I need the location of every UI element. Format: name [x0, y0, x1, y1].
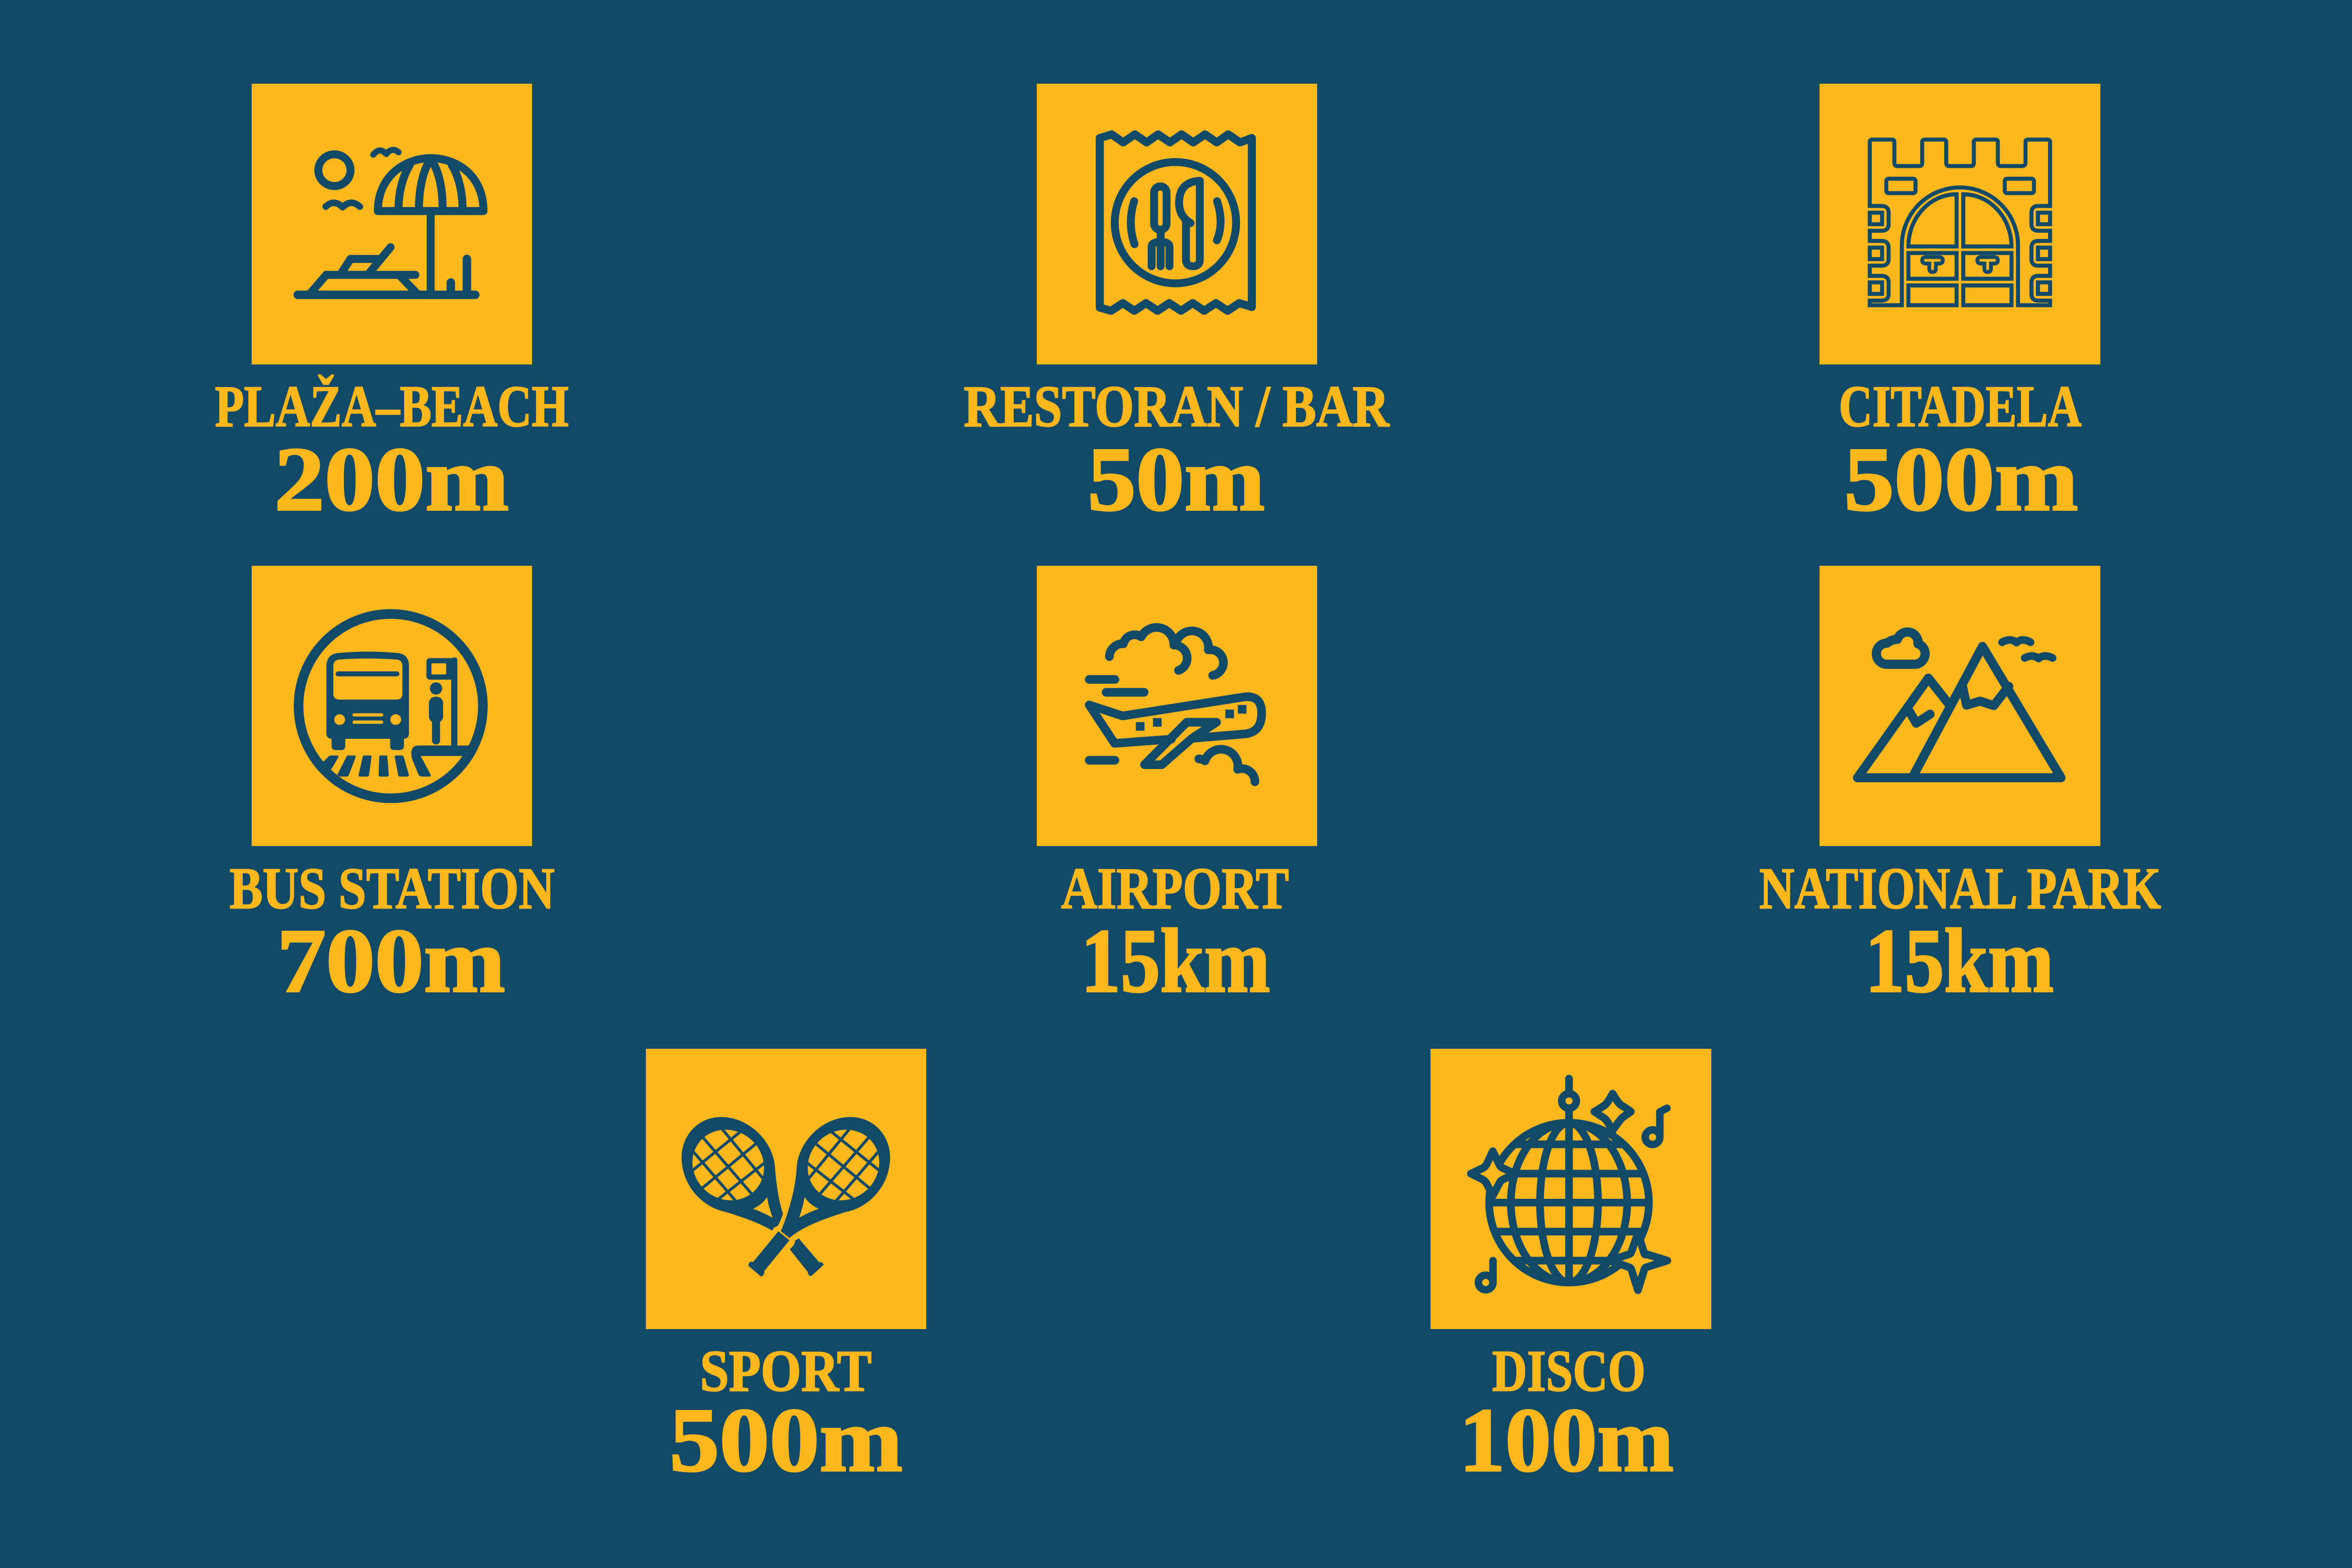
label: airport: AIRPORT	[1061, 856, 1289, 921]
distance: beach: 200m	[274, 428, 509, 530]
tile: restaurant	[1037, 84, 1317, 364]
icon: plate with fork and knife on placemat	[1100, 135, 1252, 311]
label: citadel: CITADELA	[1839, 374, 2082, 439]
tile: beach	[252, 84, 532, 364]
icon: disco ball with sparkles and notes	[1471, 1078, 1667, 1290]
panel: sport	[646, 1049, 926, 1490]
panel: beach	[215, 84, 569, 530]
panel: airport	[1037, 566, 1317, 1011]
icon: crossed tennis rackets	[678, 1115, 894, 1276]
icon: airplane with clouds	[1089, 627, 1262, 782]
distance: bus station: 700m	[277, 910, 505, 1011]
icon: fortress gate	[1868, 140, 2052, 305]
icon: bus at stop	[299, 614, 483, 798]
label: bus station: BUS STATION	[230, 856, 555, 921]
label: beach: PLAŽA–BEACH	[215, 374, 569, 439]
label: national park: NATIONAL PARK	[1759, 856, 2161, 921]
icon: beach umbrella and sun lounger	[298, 150, 484, 295]
tile: disco	[1430, 1049, 1711, 1329]
distance: airport: 15km	[1081, 910, 1270, 1011]
label: restaurant: RESTORAN / BAR	[964, 374, 1390, 439]
distance: national park: 15km	[1865, 910, 2054, 1011]
panel: disco	[1430, 1049, 1711, 1490]
panel: national park	[1759, 566, 2161, 1011]
tile: citadel	[1820, 84, 2100, 364]
panel: bus station	[230, 566, 555, 1011]
tile: national park	[1820, 566, 2100, 846]
label: sport: SPORT	[700, 1339, 872, 1404]
distance: disco: 100m	[1459, 1389, 1674, 1490]
panel: restaurant	[964, 84, 1390, 530]
distance: sport: 500m	[669, 1389, 903, 1490]
panel: citadel	[1820, 84, 2100, 530]
distance: restaurant: 50m	[1088, 428, 1265, 530]
icon: mountains with cloud and birds	[1858, 632, 2061, 778]
distance: citadel: 500m	[1844, 428, 2078, 530]
label: disco: DISCO	[1492, 1339, 1645, 1404]
tile: sport	[646, 1049, 926, 1329]
infographic canvas	[215, 84, 2161, 1473]
tile: airport	[1037, 566, 1317, 846]
tile: bus station	[252, 566, 532, 846]
